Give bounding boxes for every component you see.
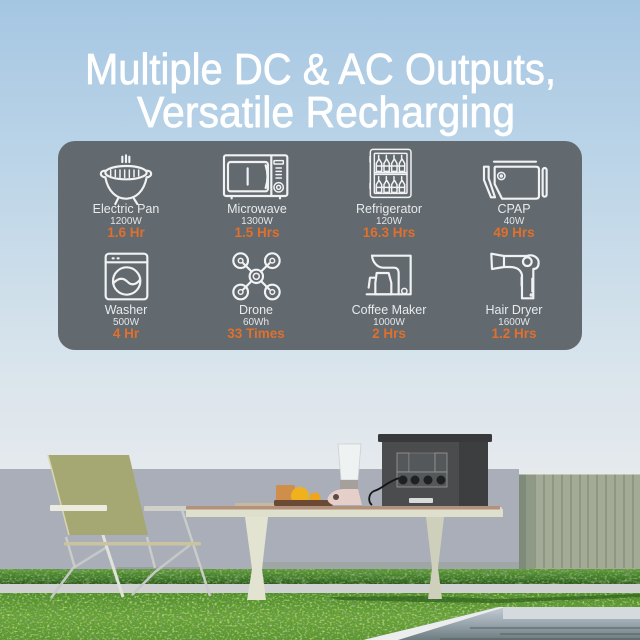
item: refrigerator: [356, 149, 422, 240]
icon: microwave: [224, 155, 287, 198]
icon: coffee maker: [367, 256, 411, 294]
runtime: microwave: 1.5 Hrs: [234, 225, 280, 240]
panel: appliance runtimes: [58, 141, 582, 350]
title: [85, 45, 556, 137]
wattage: drone: 60Wh: [243, 317, 269, 328]
icon: refrigerator: [370, 149, 411, 197]
wattage: microwave: 1300W: [241, 216, 273, 227]
wattage: electric pan: 1200W: [110, 216, 142, 227]
wattage: hair dryer: 1600W: [498, 317, 530, 328]
runtime: drone: 33 Times: [227, 326, 285, 341]
wattage: washer: 500W: [113, 317, 140, 328]
label: drone: Drone: [239, 303, 273, 317]
runtime: coffee maker: 2 Hrs: [372, 326, 406, 341]
scene: blender: [328, 444, 362, 505]
item: coffee maker: [352, 256, 426, 341]
item: electric pan: [93, 155, 159, 240]
scene: folding chair: [48, 455, 210, 598]
icon: CPAP: [484, 162, 547, 199]
icon: washer: [106, 254, 147, 299]
background sky: [0, 0, 640, 480]
icon: hair dryer: [491, 254, 539, 298]
icon: drone: [233, 253, 280, 299]
item: drone: [227, 253, 285, 341]
runtime: washer: 4 Hr: [113, 326, 140, 341]
item: hair dryer: [486, 254, 542, 341]
scene: slatted fence: [519, 473, 640, 570]
item: microwave: [224, 155, 287, 240]
scene: table: [186, 506, 503, 600]
icon: electric pan: [101, 155, 151, 204]
scene: fruit plate and cup: [235, 485, 333, 506]
wattage: CPAP: 40W: [504, 216, 525, 227]
item: CPAP: [484, 162, 547, 240]
runtime: CPAP: 49 Hrs: [493, 225, 535, 240]
runtime: refrigerator: 16.3 Hrs: [363, 225, 415, 240]
scene: garden wall: [0, 469, 519, 570]
label: coffee maker: Coffee Maker: [352, 303, 426, 317]
scene: pool: [363, 607, 640, 640]
wattage: refrigerator: 120W: [376, 216, 403, 227]
label: hair dryer: Hair Dryer: [486, 303, 542, 317]
title: Versatile Recharging: [137, 88, 515, 137]
runtime: hair dryer: 1.2 Hrs: [491, 326, 537, 341]
label: refrigerator: Refrigerator: [356, 202, 422, 216]
scene: paved path: [0, 584, 640, 595]
scene: power station: [369, 434, 492, 506]
label: CPAP: CPAP: [497, 202, 531, 216]
item: washer: [105, 254, 147, 341]
label: electric pan: Electric Pan: [93, 202, 159, 216]
runtime: electric pan: 1.6 Hr: [107, 225, 146, 240]
scene: lawn: [0, 593, 640, 640]
label: microwave: Microwave: [227, 202, 287, 216]
label: washer: Washer: [105, 303, 147, 317]
title: Multiple DC & AC Outputs,: [85, 45, 556, 94]
wattage: coffee maker: 1000W: [373, 317, 405, 328]
scene: hedge: [0, 569, 640, 584]
